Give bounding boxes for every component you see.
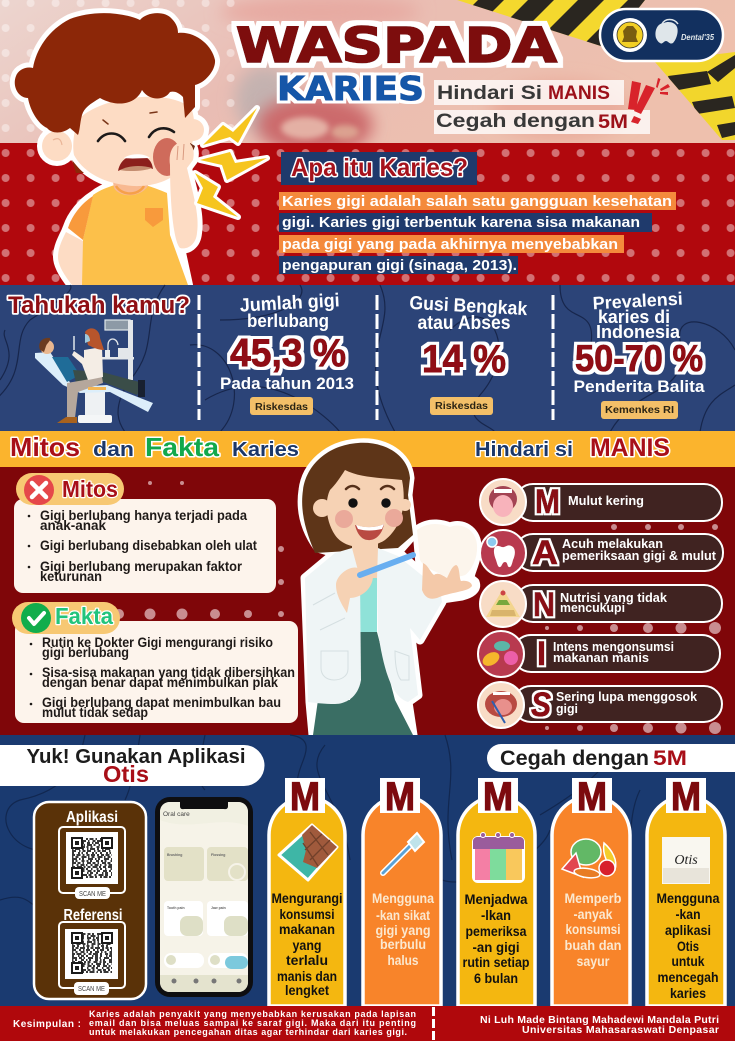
panel: mitos: Gigi berlubang merupakan faktor xyxy=(40,559,243,574)
card: jadwal pemeriksaan: pemeriksa xyxy=(466,923,527,939)
subtitle: karies: KARIES xyxy=(277,69,424,108)
panel: mitos: Mitos xyxy=(62,476,118,502)
card: sikat gigi xyxy=(363,775,441,1006)
panel: mitos: anak-anak xyxy=(40,518,106,533)
stat: gusi bengkak: atau Abses xyxy=(418,313,510,334)
card: buah dan sayur: buah dan xyxy=(564,937,622,953)
tagline: hindari si manis xyxy=(434,80,624,105)
icon: fruits and vegetables xyxy=(562,839,616,879)
stat: jumlah gigi berlubang: berlubang xyxy=(247,311,329,331)
heading: mitos dan fakta karies: Mitos xyxy=(10,432,80,462)
stat: gusi bengkak: Riskesdas xyxy=(435,400,488,412)
stat: prevalensi karies: Kemenkes RI xyxy=(605,404,674,416)
card: mengurangi: lengket xyxy=(285,982,329,998)
navy section background xyxy=(0,735,735,1007)
heading: tahukah kamu: Tahukah kamu? xyxy=(8,292,190,319)
list: M mulut kering: M xyxy=(535,483,560,521)
footer: conclusion and credit xyxy=(0,1006,735,1041)
card: mengurangi: konsumsi xyxy=(280,906,334,922)
character: dentist doctor holding tooth and toothbrush xyxy=(302,443,477,735)
icon: calendar xyxy=(473,832,524,882)
stat: gusi bengkak xyxy=(409,293,528,415)
tagline: hindari si manis: MANIS xyxy=(548,83,610,104)
qr finder marks xyxy=(72,838,112,973)
phone mockup: oral care app: Oral care xyxy=(163,811,190,818)
panel: fakta xyxy=(12,602,298,723)
dashed dividers xyxy=(199,295,553,420)
panel: fakta: dengan benar dapat menimbulkan plak xyxy=(42,675,278,690)
card: sikat gigi: -kan sikat xyxy=(376,907,430,923)
card: buah dan sayur: -anyak xyxy=(574,906,613,922)
heading: apa itu karies: Apa itu Karies? xyxy=(291,154,468,182)
footer: conclusion and credit: email dan bisa meluas sampai ke saraf gigi. Maka dari itu penting xyxy=(89,1018,416,1028)
list: S sering xyxy=(478,682,722,728)
card: mengurangi: makanan xyxy=(279,921,335,937)
phone mockup: oral care app: Tooth pain xyxy=(167,906,185,910)
tagline: hindari si manis: Hindari Si xyxy=(437,83,542,104)
heading: mitos dan fakta karies xyxy=(10,432,299,462)
card: jadwal pemeriksaan: Menjadwa xyxy=(464,891,528,907)
phone mockup: oral care app xyxy=(155,797,253,997)
definition text xyxy=(279,192,676,274)
stat: jumlah gigi berlubang xyxy=(220,290,354,415)
stat: gusi bengkak: 14 % xyxy=(422,338,506,381)
icon: exclamation marks xyxy=(628,78,670,124)
card: mengurangi xyxy=(269,775,345,1006)
list: I intens: makanan manis xyxy=(553,651,649,665)
header photo background xyxy=(0,0,735,155)
card: aplikasi otis xyxy=(647,775,725,1006)
list: A acuh: Acuh melakukan xyxy=(562,537,663,551)
card: sikat gigi: berbulu xyxy=(380,936,426,952)
qr code: referensi xyxy=(72,934,112,972)
red section: what is caries xyxy=(0,143,735,285)
phone mockup: oral care app: Jaw pain xyxy=(211,906,226,910)
logo pill xyxy=(600,9,723,61)
footer: conclusion and credit: Karies adalah penyakit yang menyebabkan kerusakan pada lapisan xyxy=(89,1009,416,1019)
list: N nutrisi xyxy=(480,581,722,627)
tagline: cegah dengan 5M xyxy=(434,110,650,134)
list: A acuh: pemeriksaan gigi & mulut xyxy=(562,549,717,563)
card: aplikasi otis: M xyxy=(671,775,701,819)
stat: prevalensi karies xyxy=(574,289,705,419)
panel: mitos: Gigi berlubang hanya terjadi pada xyxy=(40,508,247,523)
list: S sering: Sering lupa menggosok xyxy=(556,690,697,704)
card: sikat gigi: M xyxy=(385,775,415,819)
card: jadwal pemeriksaan: M xyxy=(483,775,513,819)
heading: hindari si manis xyxy=(475,434,670,462)
panel: qr codes: Referensi xyxy=(64,907,122,924)
heading: mitos dan fakta karies: Fakta xyxy=(145,432,220,462)
definition text: Karies gigi adalah salah satu gangguan kesehatan xyxy=(282,194,672,210)
card: sikat gigi: halus xyxy=(388,952,419,968)
dark red section with dots xyxy=(0,467,735,735)
card: jadwal pemeriksaan: -lkan xyxy=(481,907,511,923)
panel: fakta: mulut tidak sedap xyxy=(42,705,148,720)
panel: qr codes: SCAN ME xyxy=(79,889,106,898)
definition text: pada gigi yang pada akhirnya menyebabkan xyxy=(282,237,618,253)
card: aplikasi otis: mencegah xyxy=(658,969,718,985)
stat: jumlah gigi berlubang: Jumlah gigi xyxy=(239,290,340,317)
card: buah dan sayur: sayur xyxy=(576,953,610,969)
card: aplikasi otis: Mengguna xyxy=(656,890,720,906)
card: buah dan sayur: M xyxy=(577,775,607,819)
card: aplikasi otis: untuk xyxy=(672,953,705,969)
card: jadwal pemeriksaan: 6 bulan xyxy=(474,970,518,986)
panel: fakta: Gigi berlubang dapat menimbulkan bau xyxy=(42,695,281,710)
card: mengurangi: manis dan xyxy=(277,968,337,984)
character: boy with toothache xyxy=(15,13,215,285)
card: mengurangi: M xyxy=(290,775,320,819)
list: S sering: gigi xyxy=(556,702,578,716)
list: I intens: Intens mengonsumsi xyxy=(553,640,674,654)
icon: pain lightning xyxy=(195,108,267,217)
phone mockup: oral care app: Flossing xyxy=(211,853,225,857)
heading: mitos dan fakta karies: dan xyxy=(93,439,134,461)
card: aplikasi otis: Otis xyxy=(677,938,699,954)
stat: jumlah gigi berlubang: 45,3 % xyxy=(230,332,346,375)
stat: prevalensi karies: 50-70 % xyxy=(575,338,703,379)
title: WASPADA xyxy=(236,18,557,74)
tagline: cegah dengan 5M: 5M xyxy=(598,112,628,133)
card: mengurangi: yang xyxy=(292,937,322,953)
definition text: gigi. Karies gigi terbentuk karena sisa makanan xyxy=(282,215,640,231)
list: M mulut kering xyxy=(480,479,722,525)
stat: gusi bengkak: Gusi Bengkak xyxy=(409,293,528,320)
footer: conclusion and credit: Kesimpulan : xyxy=(13,1019,81,1030)
banner: cegah dengan 5M: Cegah dengan xyxy=(500,747,649,770)
panel: fakta: Rutin ke Dokter Gigi mengurangi risiko xyxy=(42,635,273,650)
icon: otis app: Otis xyxy=(674,853,698,868)
list: A acuh xyxy=(480,530,723,576)
panel: fakta: Sisa-sisa makanan yang tidak dibersihkan xyxy=(42,665,295,680)
illustration: dentist and patient xyxy=(35,320,153,423)
footer: conclusion and credit: untuk melakukan pencegahan ditas agar terhindar dari karies gigi. xyxy=(89,1027,407,1037)
list: N nutrisi: mencukupi xyxy=(560,601,625,615)
card: buah dan sayur: konsumsi xyxy=(566,921,620,937)
banner: yuk gunakan aplikasi otis xyxy=(0,745,264,787)
stat: prevalensi karies: Prevalensi xyxy=(592,289,683,313)
panel: qr codes xyxy=(34,802,146,999)
qr code: aplikasi xyxy=(72,839,112,877)
banner: cegah dengan 5M: 5M xyxy=(653,747,687,770)
phone mockup: oral care app: Brushing xyxy=(167,853,182,857)
stat: prevalensi karies: Indonesia xyxy=(596,322,681,342)
panel: qr codes: SCAN ME xyxy=(78,984,105,993)
banner: yuk gunakan aplikasi otis: Yuk! Gunakan Aplikasi xyxy=(26,746,246,768)
hazard tape xyxy=(457,0,735,140)
panel: fakta: Fakta xyxy=(55,603,113,629)
stat: jumlah gigi berlubang: Riskesdas xyxy=(255,401,308,413)
heading: hindari si manis: MANIS xyxy=(590,434,670,462)
yellow heading band xyxy=(0,431,735,467)
heading: mitos dan fakta karies: Karies xyxy=(232,439,299,461)
panel: qr codes: Aplikasi xyxy=(66,809,118,826)
footer: conclusion and credit: Ni Luh Made Bintang Mahadewi Mandala Putri xyxy=(480,1014,719,1026)
banner: cegah dengan 5M xyxy=(487,744,735,772)
footer: conclusion and credit: Universitas Mahasaraswati Denpasar xyxy=(522,1024,719,1036)
list: M mulut kering: Mulut kering xyxy=(568,494,644,508)
card: jadwal pemeriksaan xyxy=(458,775,535,1006)
logo pill: Dental'35 xyxy=(681,33,715,42)
list: A acuh: A xyxy=(532,534,558,572)
list: I intens xyxy=(478,631,720,677)
panel: mitos xyxy=(14,473,276,593)
stat: prevalensi karies: Penderita Balita xyxy=(574,377,705,396)
icon: chocolate xyxy=(279,825,337,880)
stat: prevalensi karies: karies di xyxy=(598,307,670,327)
panel: fakta: gigi berlubang xyxy=(42,645,129,660)
list: N nutrisi: N xyxy=(533,586,555,624)
card: jadwal pemeriksaan: -an gigi xyxy=(472,939,520,955)
card: mengurangi: terlalu xyxy=(286,952,328,968)
panel: did you know xyxy=(0,285,735,432)
panel: mitos: Gigi berlubang disebabkan oleh ulat xyxy=(40,538,257,553)
banner: yuk gunakan aplikasi otis: Otis xyxy=(103,761,149,787)
card: buah dan sayur: Memperb xyxy=(564,890,622,906)
card: sikat gigi: gigi yang xyxy=(376,922,430,938)
icon: otis app xyxy=(662,837,710,884)
card: mengurangi: Mengurangi xyxy=(272,890,342,906)
card: jadwal pemeriksaan: rutin setiap xyxy=(462,954,530,970)
stat: jumlah gigi berlubang: Pada tahun 2013 xyxy=(220,374,354,393)
heading: hindari si manis: Hindari si xyxy=(475,439,573,461)
definition text: pengapuran gigi (sinaga, 2013). xyxy=(282,258,517,274)
list: S sering: S xyxy=(531,686,551,724)
card: sikat gigi: Mengguna xyxy=(372,890,434,906)
list: I intens: I xyxy=(537,635,546,673)
card: aplikasi otis: aplikasi xyxy=(665,922,711,938)
card: aplikasi otis: -kan xyxy=(676,906,700,922)
card: buah dan sayur xyxy=(552,775,630,1006)
tagline: cegah dengan 5M: Cegah dengan xyxy=(436,111,595,132)
panel: mitos: keturunan xyxy=(40,569,102,584)
list: N nutrisi: Nutrisi yang tidak xyxy=(560,591,667,605)
icon: toothbrush xyxy=(383,833,424,873)
card: aplikasi otis: karies xyxy=(670,985,706,1001)
